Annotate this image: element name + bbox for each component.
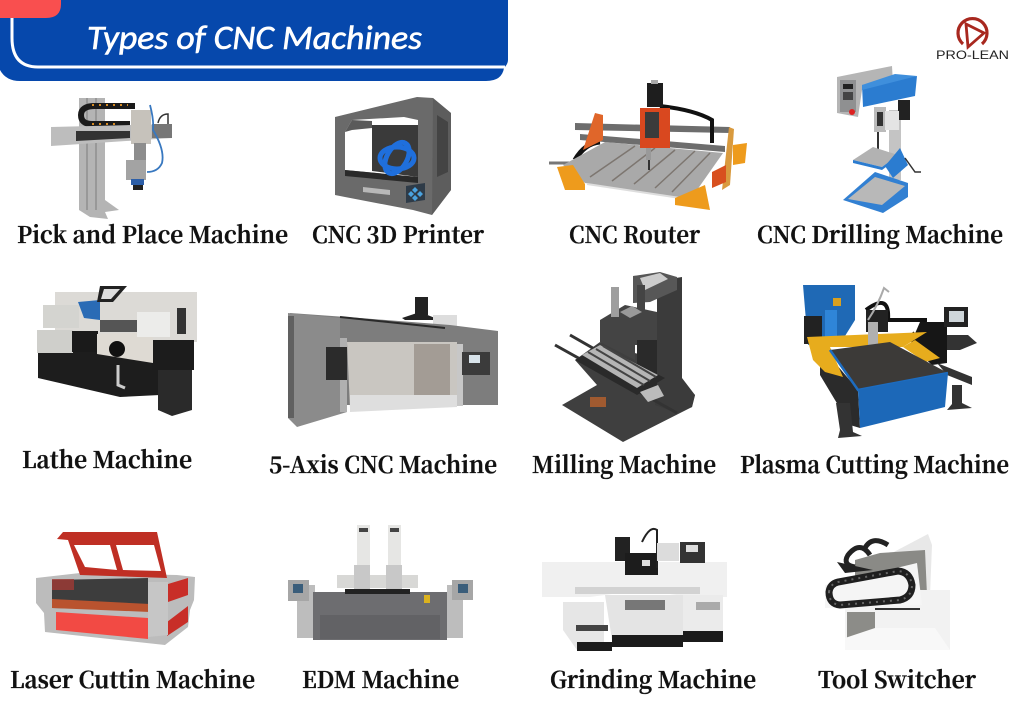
label: Laser Cuttin Machine bbox=[10, 662, 255, 695]
logo: PRO-LEAN: PRO-LEAN bbox=[936, 50, 1009, 62]
panel: laser cutting machine bbox=[10, 532, 255, 695]
label: CNC Router bbox=[569, 217, 700, 250]
icon: tool switcher bbox=[825, 534, 950, 650]
label: EDM Machine bbox=[302, 662, 459, 695]
icon: drilling machine bbox=[837, 66, 921, 213]
label: CNC Drilling Machine bbox=[757, 217, 1003, 250]
label: Grinding Machine bbox=[550, 662, 756, 695]
panel: grinding machine bbox=[542, 529, 756, 695]
label: Lathe Machine bbox=[22, 442, 192, 475]
logo: PRO-LEAN bbox=[936, 19, 1009, 62]
panel: EDM machine bbox=[288, 525, 473, 695]
panel: milling machine bbox=[532, 272, 716, 480]
icon: lathe machine bbox=[37, 286, 197, 416]
icon: CNC router bbox=[549, 80, 747, 210]
red corner tab bbox=[0, 0, 61, 18]
label: 5-Axis CNC Machine bbox=[269, 447, 497, 480]
title: Types of CNC Machines bbox=[87, 18, 422, 59]
label: Plasma Cutting Machine bbox=[740, 447, 1009, 480]
panel: tool switcher bbox=[818, 534, 976, 695]
icon: milling machine bbox=[555, 272, 695, 442]
label: Pick and Place Machine bbox=[17, 217, 288, 250]
panel: CNC 3D printer bbox=[312, 97, 484, 250]
header banner bbox=[0, 0, 508, 81]
icon: 5-axis CNC machine bbox=[288, 297, 498, 427]
icon: pick and place machine bbox=[51, 98, 172, 219]
icon: laser cutter bbox=[36, 532, 195, 645]
icon: 3D printer bbox=[335, 97, 451, 215]
panel: 5-axis CNC machine bbox=[269, 297, 498, 480]
panel: lathe machine bbox=[22, 286, 197, 475]
label: CNC 3D Printer bbox=[312, 217, 484, 250]
icon: plasma cutting machine bbox=[803, 285, 977, 438]
panel: CNC router bbox=[549, 80, 747, 250]
icon: EDM machine bbox=[288, 525, 473, 640]
label: Milling Machine bbox=[532, 447, 716, 480]
label: Tool Switcher bbox=[818, 662, 976, 695]
icon: grinding machine bbox=[542, 529, 727, 651]
panel: CNC drilling machine bbox=[757, 66, 1003, 250]
panel: pick and place machine bbox=[17, 98, 288, 250]
panel: plasma cutting machine bbox=[740, 285, 1009, 480]
